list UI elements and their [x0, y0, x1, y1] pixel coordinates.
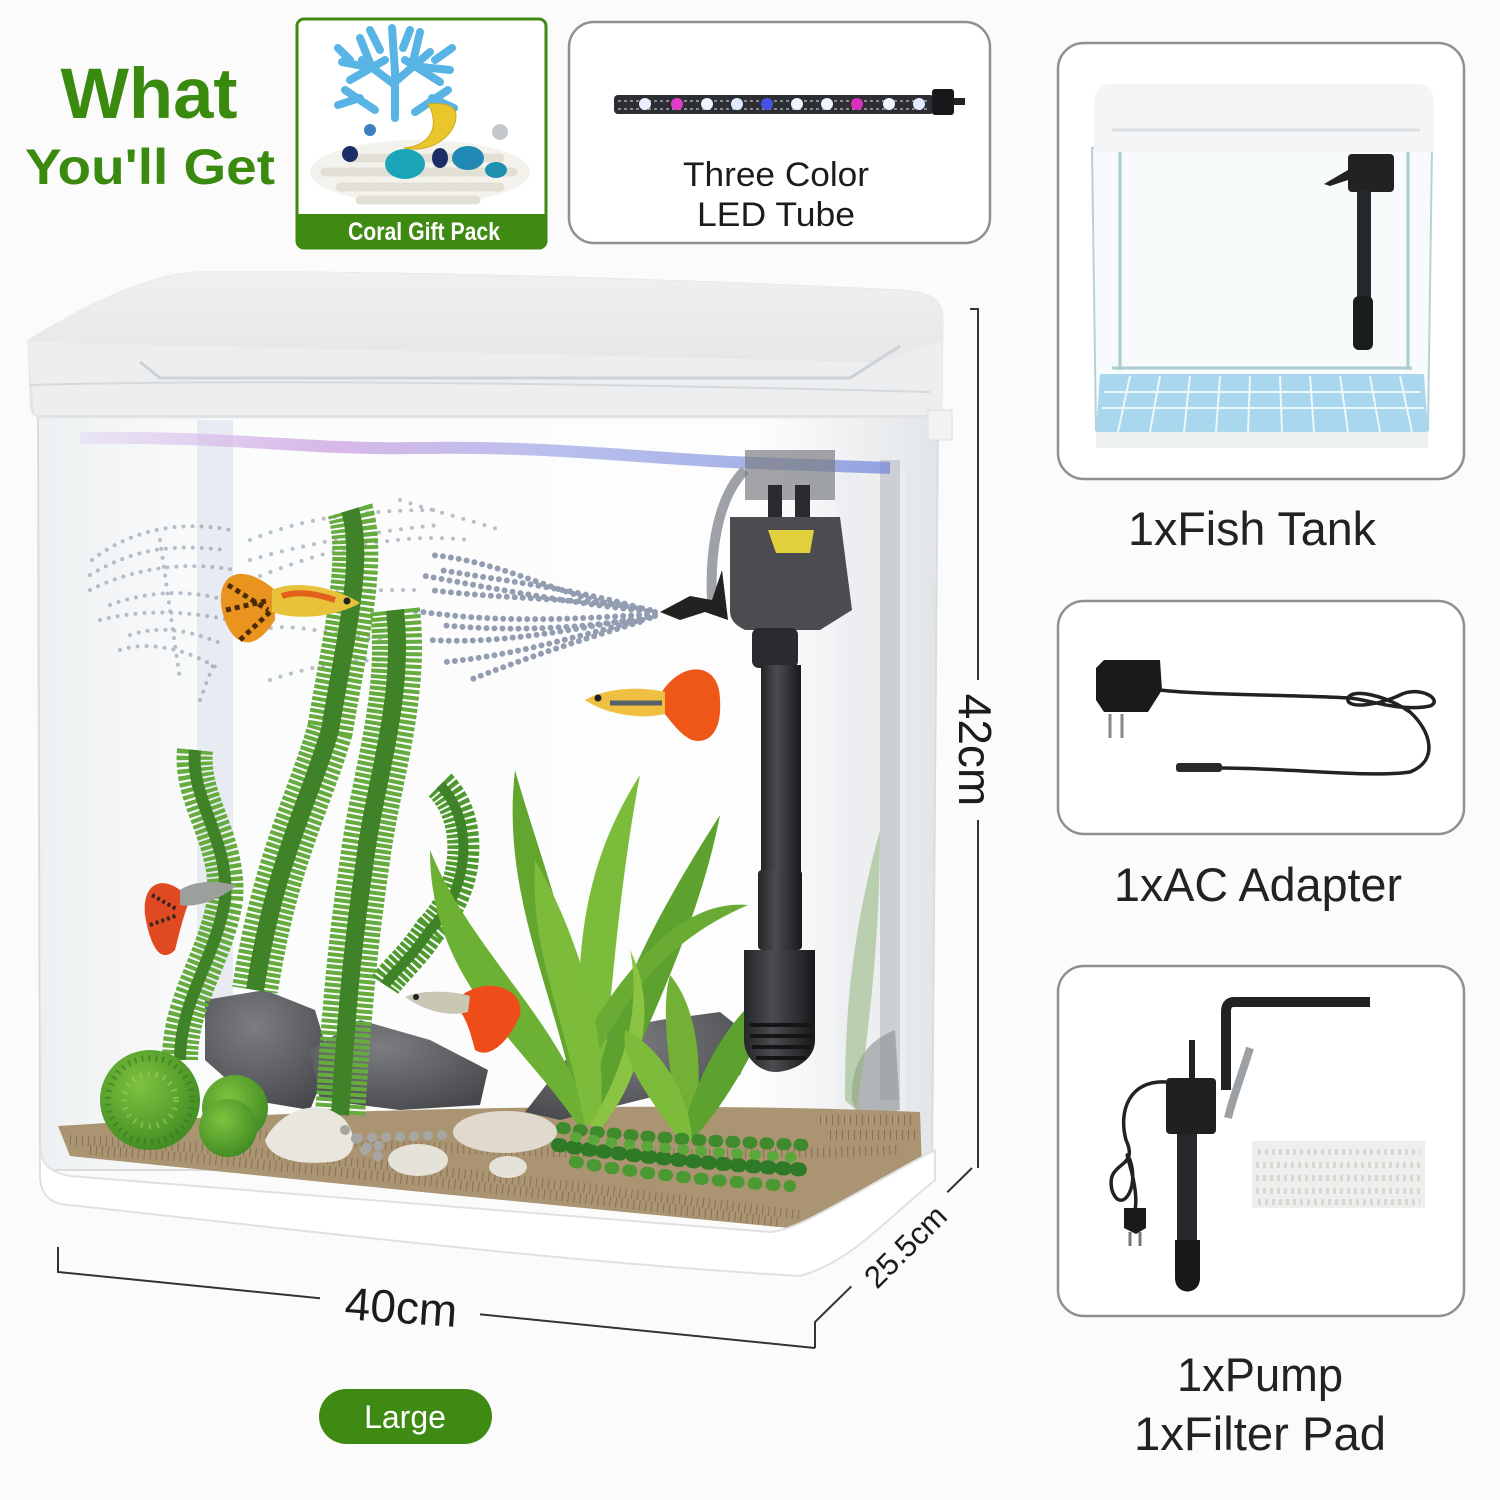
- tank lid: [28, 272, 952, 440]
- size badge: Large: [319, 1389, 492, 1444]
- fish: yellow guppy top: [221, 574, 360, 642]
- foreground seedlings: [558, 1128, 810, 1186]
- fish: orange guppy right: [585, 669, 720, 741]
- label: fish tank: 1xFish Tank: [1128, 502, 1376, 555]
- reflected pump: [845, 460, 900, 1120]
- dimension: height 42cm: 42cm: [949, 694, 1001, 806]
- panel: coral gift pack: [297, 19, 546, 248]
- label bar: Coral Gift Pack: Coral Gift Pack: [348, 218, 500, 246]
- icon: LED strip: [614, 89, 965, 115]
- dimension: depth 25.5cm: [815, 1168, 972, 1348]
- panel: fish tank: [1058, 43, 1464, 479]
- rocks: [205, 990, 755, 1120]
- tank base: [40, 1148, 935, 1276]
- label: pump and filter pad: [1134, 1348, 1386, 1460]
- heading: What You'll Get: You'll Get: [25, 139, 275, 195]
- sand substrate: [58, 1107, 922, 1228]
- moss balls: [100, 1050, 268, 1157]
- dimension: width 40cm: [58, 1247, 815, 1348]
- gift pack pebbles: [310, 104, 530, 204]
- icon: filter pad: [1252, 1141, 1425, 1208]
- broad-leaf plant: [430, 770, 788, 1140]
- pebbles: [265, 1107, 557, 1178]
- label: AC adapter: 1xAC Adapter: [1114, 858, 1402, 911]
- dimension: depth 25.5cm: 25.5cm: [857, 1198, 954, 1295]
- dimension: width 40cm: 40cm: [343, 1277, 459, 1337]
- LED label: LED Tube: [697, 196, 855, 234]
- panel: AC adapter: [1058, 601, 1464, 834]
- LED label: Three Color: [683, 156, 869, 194]
- filter pump: [660, 450, 852, 1072]
- LED light glow: [80, 438, 890, 468]
- tank glass: [38, 412, 938, 1170]
- label: pump and filter pad: 1xFilter Pad: [1134, 1407, 1386, 1460]
- bubbles: [90, 500, 655, 700]
- label bar: Coral Gift Pack: [297, 214, 546, 248]
- heading: What You'll Get: [25, 55, 275, 195]
- icon: blue coral: [338, 28, 454, 118]
- main aquarium: [28, 272, 952, 1276]
- fish: left red guppy: [145, 882, 236, 955]
- label: pump and filter pad: 1xPump: [1177, 1348, 1343, 1401]
- panel: pump and filter pad: [1058, 966, 1464, 1316]
- fish: bottom red guppy: [405, 986, 520, 1053]
- dimension: height 42cm: [949, 309, 1001, 1168]
- icon: adapter and cord: [1096, 660, 1434, 774]
- feathery plants: [180, 510, 463, 1115]
- icon: empty tank: [1092, 84, 1434, 448]
- LED label: [683, 156, 869, 234]
- heading: What You'll Get: What: [60, 55, 238, 134]
- icon: pump: [1111, 1002, 1370, 1292]
- size badge: Large: Large: [364, 1399, 446, 1435]
- panel: LED tube: [569, 22, 990, 243]
